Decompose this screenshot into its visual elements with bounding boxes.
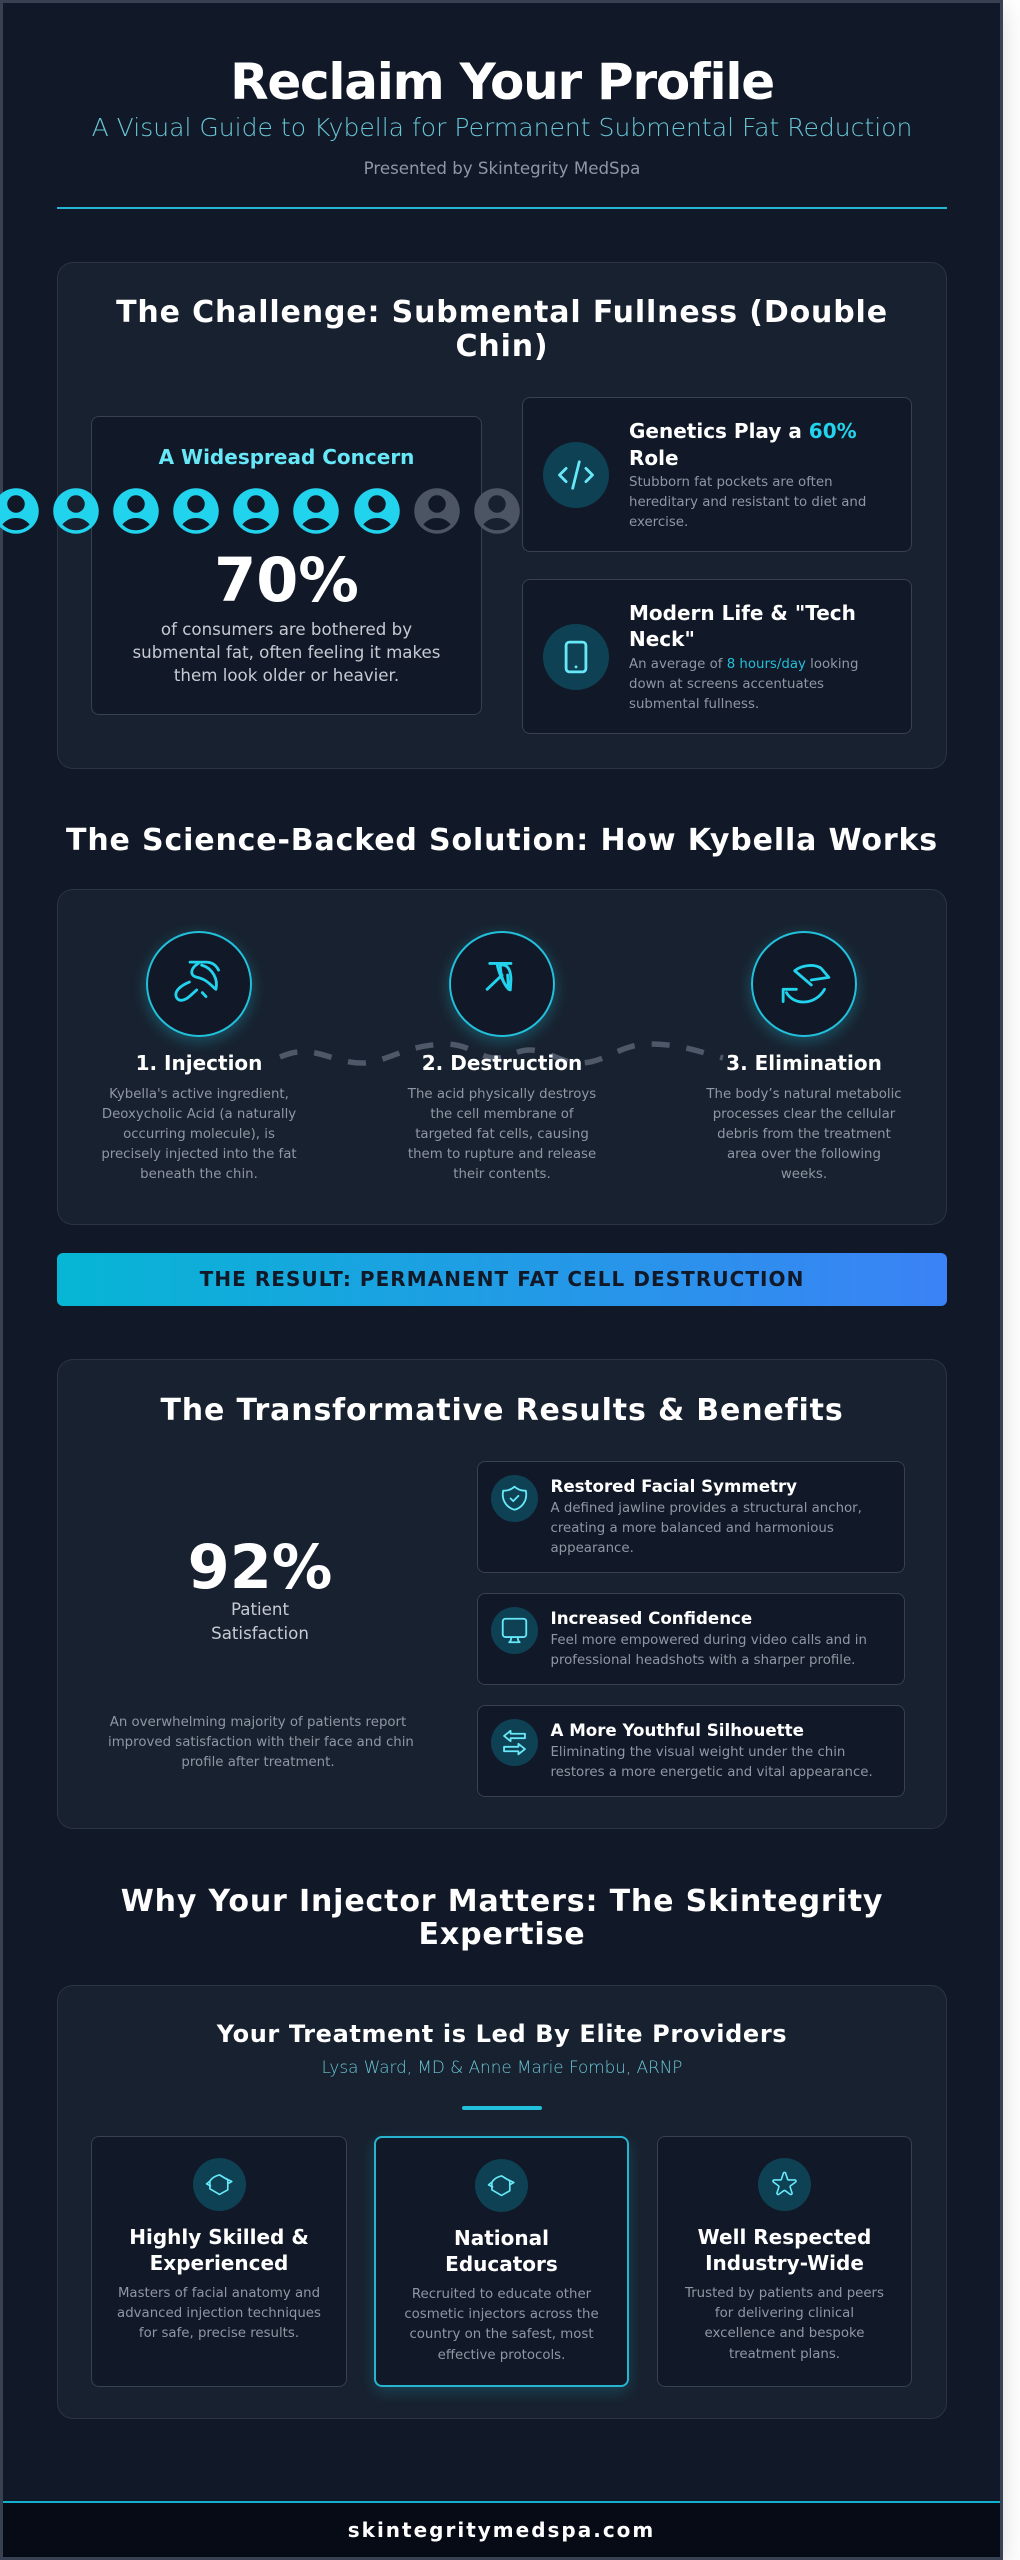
heading: the challenge bbox=[116, 295, 888, 364]
genetics text: exercise. bbox=[629, 515, 688, 530]
step text: debris from the treatment bbox=[717, 1127, 891, 1142]
benefit text: creating a more balanced and harmonious bbox=[550, 1521, 834, 1536]
icon: graduation cap bbox=[192, 2158, 246, 2210]
icon: graduation cap bbox=[475, 2158, 528, 2212]
step text: processes clear the cellular bbox=[713, 1107, 895, 1122]
heading: the challenge: Chin) bbox=[456, 329, 548, 364]
heading: elite providers: Your Treatment is Led By Elite Providers bbox=[217, 2020, 787, 2048]
statistic label: Patient bbox=[231, 1600, 289, 1619]
tech neck text: submental fullness. bbox=[629, 697, 759, 712]
benefit text: A defined jawline provides a structural anchor, bbox=[550, 1501, 862, 1516]
card text: Recruited to educate other bbox=[412, 2287, 591, 2302]
card text: Masters of facial anatomy and bbox=[118, 2286, 320, 2301]
step text: occurring molecule), is bbox=[123, 1127, 275, 1142]
genetics text: Stubborn fat pockets are often bbox=[629, 474, 833, 490]
step text: beneath the chin. bbox=[140, 1167, 258, 1182]
section heading: injector expertise bbox=[121, 1884, 883, 1952]
accent rule bbox=[462, 2106, 542, 2110]
step title: 1. Injection bbox=[136, 1051, 262, 1075]
card text: treatment plans. bbox=[729, 2347, 840, 2362]
card heading: A Widespread Concern bbox=[159, 445, 414, 469]
icon: monitor bbox=[490, 1606, 538, 1654]
step text bbox=[706, 1087, 902, 1182]
statistic description: them look older or heavier. bbox=[174, 666, 399, 685]
benefit heading: Restored Facial Symmetry bbox=[550, 1477, 797, 1496]
step text bbox=[408, 1087, 596, 1182]
card: highly skilled bbox=[91, 2136, 347, 2387]
tech neck heading bbox=[629, 601, 856, 651]
icon: swap arrows bbox=[490, 1718, 538, 1766]
heading: the challenge: The Challenge: Submental Fullness (Double bbox=[116, 295, 888, 330]
step 3: elimination bbox=[706, 928, 902, 1182]
panel: results and benefits bbox=[57, 1359, 947, 1829]
result banner: THE RESULT: PERMANENT FAT CELL DESTRUCTION bbox=[200, 1266, 804, 1290]
subtitle: A Visual Guide to Kybella for Permanent Submental Fat Reduction bbox=[92, 113, 912, 142]
step text: weeks. bbox=[781, 1167, 827, 1182]
card text: for safe, precise results. bbox=[139, 2326, 299, 2341]
benefit heading: Increased Confidence bbox=[550, 1609, 752, 1628]
section heading: injector expertise: Why Your Injector Matters: The Skintegrity bbox=[121, 1884, 883, 1919]
icon: shield check bbox=[490, 1474, 538, 1522]
benefit text: professional headshots with a sharper profile. bbox=[550, 1653, 855, 1668]
genetics heading: Role bbox=[629, 446, 679, 470]
card text: cosmetic injectors across the bbox=[404, 2307, 599, 2322]
benefit heading: A More Youthful Silhouette bbox=[550, 1721, 804, 1740]
genetics text: hereditary and resistant to diet and bbox=[629, 495, 866, 510]
tech neck heading: Neck" bbox=[629, 627, 695, 651]
genetics heading bbox=[629, 419, 857, 470]
card heading bbox=[698, 2225, 871, 2275]
statistic: 92%: 92% bbox=[188, 1533, 332, 1603]
panel: the challenge bbox=[57, 262, 947, 769]
step text: area over the following bbox=[727, 1147, 881, 1162]
benefit text: appearance. bbox=[550, 1541, 634, 1556]
step text bbox=[101, 1087, 297, 1182]
statistic description: submental fat, often feeling it makes bbox=[132, 643, 440, 662]
section heading: injector expertise: Expertise bbox=[419, 1917, 585, 1952]
step text: The body’s natural metabolic bbox=[706, 1087, 902, 1102]
icon: recycle arrows bbox=[751, 931, 857, 1037]
footer bbox=[3, 2501, 1000, 2557]
card text bbox=[684, 2286, 884, 2362]
statistic description: profile after treatment. bbox=[181, 1755, 335, 1770]
step text: Deoxycholic Acid (a naturally bbox=[102, 1107, 296, 1122]
statistic: 70%: 70% bbox=[214, 546, 359, 616]
card heading: Well Respected bbox=[698, 2225, 871, 2249]
card text: for delivering clinical bbox=[715, 2306, 854, 2321]
statistic label bbox=[211, 1600, 309, 1643]
benefit text: Feel more empowered during video calls and in bbox=[550, 1633, 867, 1648]
card text: effective protocols. bbox=[438, 2348, 565, 2363]
statistic description bbox=[108, 1715, 414, 1770]
benefit text bbox=[550, 1633, 867, 1668]
card heading: National bbox=[454, 2226, 549, 2250]
card heading: Highly Skilled & bbox=[129, 2225, 309, 2249]
statistic description: An overwhelming majority of patients report bbox=[110, 1715, 406, 1730]
step title: 2. Destruction bbox=[422, 1051, 582, 1075]
benefit text: Eliminating the visual weight under the chin bbox=[550, 1745, 845, 1760]
step text: precisely injected into the fat bbox=[101, 1147, 297, 1162]
pictogram: 7 of 9 people bbox=[0, 488, 520, 534]
card heading: Educators bbox=[445, 2252, 558, 2276]
benefit: confidence bbox=[477, 1593, 905, 1685]
statistic description: improved satisfaction with their face and chin bbox=[108, 1735, 414, 1750]
step 1: injection bbox=[101, 928, 297, 1182]
icon: star bbox=[758, 2158, 811, 2210]
statistic description: of consumers are bothered by bbox=[161, 620, 412, 638]
tech neck text: An average of 8 hours/day looking bbox=[629, 657, 858, 672]
title: Reclaim Your Profile bbox=[230, 53, 774, 111]
icon: code bbox=[543, 442, 609, 508]
presenter line: Presented by Skintegrity MedSpa bbox=[364, 159, 640, 178]
tech neck heading: Modern Life & "Tech bbox=[629, 601, 856, 625]
benefit text bbox=[550, 1745, 873, 1780]
genetics heading: Genetics Play a 60% bbox=[629, 419, 857, 443]
card heading bbox=[445, 2226, 558, 2276]
icon: syringe bbox=[146, 931, 252, 1037]
heading: results and benefits: The Transformative Results & Benefits bbox=[160, 1393, 844, 1428]
card: widespread concern bbox=[91, 416, 482, 715]
section heading: how kybella works: The Science-Backed Solution: How Kybella Works bbox=[66, 823, 938, 858]
card: genetics bbox=[522, 397, 912, 552]
provider names: Lysa Ward, MD & Anne Marie Fombu, ARNP bbox=[322, 2057, 682, 2077]
step 2: destruction bbox=[408, 928, 596, 1182]
step text: their contents. bbox=[453, 1167, 551, 1182]
footer url: skintegritymedspa.com bbox=[348, 2518, 655, 2542]
panel: how kybella works bbox=[57, 889, 947, 1225]
benefit text: restores a more energetic and vital appearance. bbox=[550, 1765, 873, 1780]
header bbox=[57, 53, 947, 209]
result banner bbox=[57, 1253, 947, 1306]
step text: targeted fat cells, causing bbox=[415, 1127, 589, 1142]
benefit text bbox=[550, 1501, 862, 1556]
benefit: silhouette bbox=[477, 1705, 905, 1797]
icon: cell burst bbox=[449, 931, 555, 1037]
card text: advanced injection techniques bbox=[117, 2306, 321, 2321]
statistic label: Satisfaction bbox=[211, 1624, 309, 1643]
genetics text bbox=[629, 474, 866, 530]
panel: elite providers bbox=[57, 1985, 947, 2419]
card heading bbox=[129, 2225, 309, 2275]
step text: Kybella's active ingredient, bbox=[109, 1087, 289, 1102]
step text: them to rupture and release bbox=[408, 1147, 596, 1162]
card text bbox=[117, 2286, 321, 2341]
card: tech neck bbox=[522, 579, 912, 734]
step text: the cell membrane of bbox=[430, 1107, 574, 1122]
card heading: Experienced bbox=[150, 2251, 288, 2275]
benefit: facial symmetry bbox=[477, 1461, 905, 1573]
card text: Trusted by patients and peers bbox=[685, 2286, 884, 2301]
step title: 3. Elimination bbox=[726, 1051, 882, 1075]
icon: phone bbox=[543, 624, 609, 690]
tech neck text: down at screens accentuates bbox=[629, 677, 824, 692]
card: well respected bbox=[657, 2136, 912, 2387]
card heading: Industry-Wide bbox=[705, 2251, 864, 2275]
header rule bbox=[57, 207, 947, 209]
card text bbox=[404, 2287, 599, 2363]
statistic description bbox=[132, 620, 440, 685]
card text: country on the safest, most bbox=[409, 2327, 594, 2342]
dashed connector line bbox=[279, 1041, 724, 1066]
card: national educators bbox=[374, 2136, 629, 2387]
step text: The acid physically destroys bbox=[408, 1087, 596, 1102]
card text: excellence and bespoke bbox=[705, 2326, 864, 2341]
tech neck text bbox=[629, 657, 858, 712]
